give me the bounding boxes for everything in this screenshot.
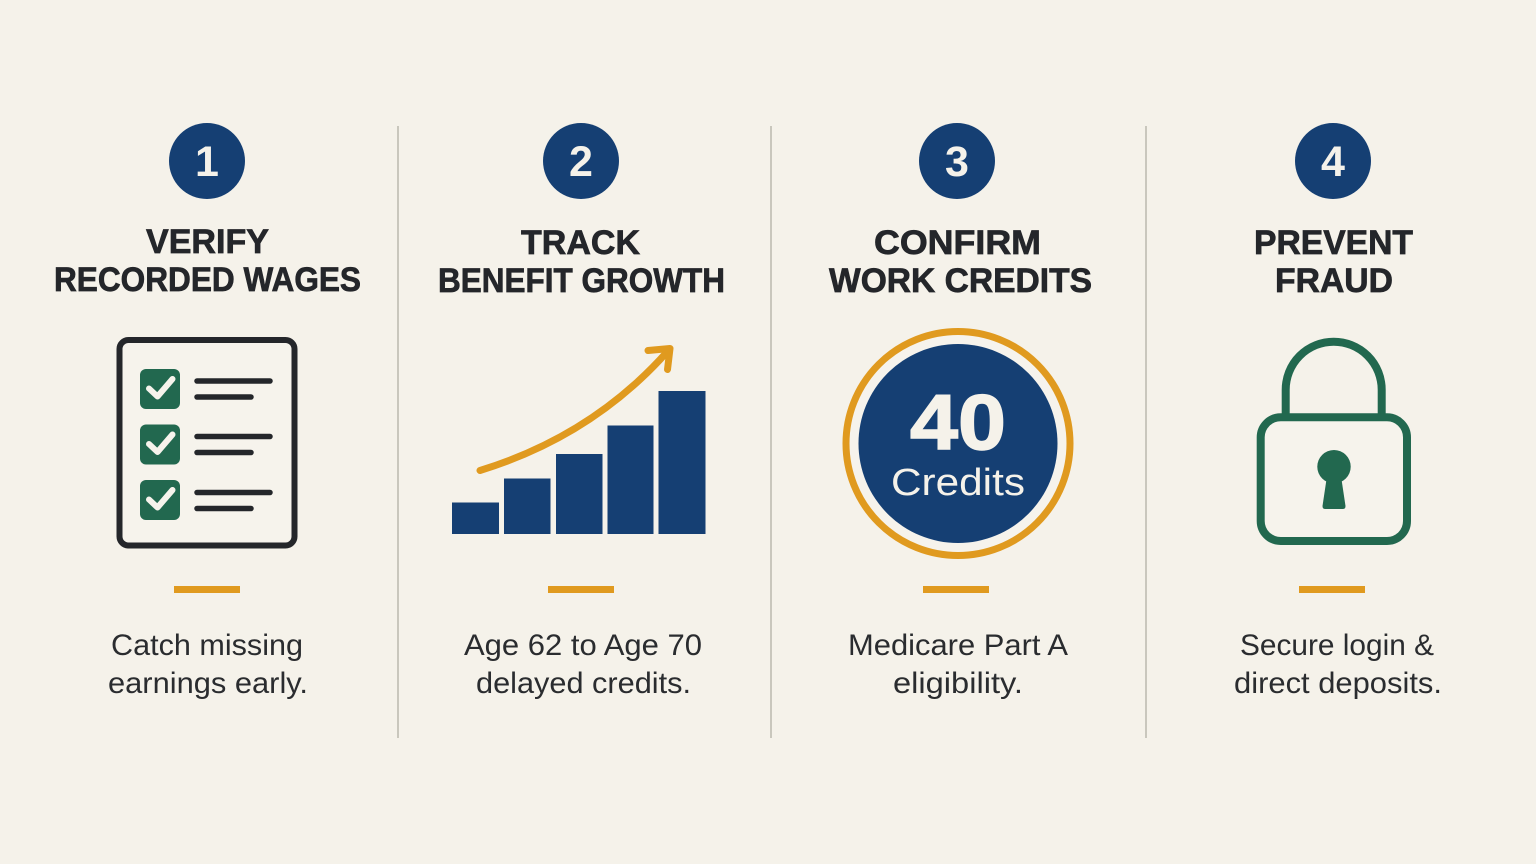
step number 3 xyxy=(919,123,995,199)
description: secure login: direct deposits. xyxy=(1234,667,1442,700)
heading: track benefit growth: BENEFIT GROWTH xyxy=(438,262,725,300)
heading: prevent fraud: PREVENT xyxy=(1254,224,1413,262)
panel: confirm work credits xyxy=(829,123,1092,700)
description: secure login xyxy=(1234,629,1442,700)
step number 4: 4 xyxy=(1321,138,1345,186)
description: catch missing earnings xyxy=(108,629,308,700)
step number 2: 2 xyxy=(569,138,593,186)
description: age 62 to age 70 xyxy=(464,629,702,700)
icon: padlock xyxy=(1261,342,1407,541)
icon: checklist xyxy=(120,340,294,546)
heading: verify recorded wages: RECORDED WAGES xyxy=(54,261,361,299)
description: age 62 to age 70: Age 62 to Age 70 xyxy=(464,629,702,662)
description: secure login: Secure login & xyxy=(1240,629,1434,662)
heading: confirm work credits: CONFIRM xyxy=(874,224,1041,262)
panel: track benefit growth xyxy=(438,123,725,700)
step number 1: 1 xyxy=(195,138,219,186)
heading: track benefit growth xyxy=(438,224,725,300)
step number 2 xyxy=(543,123,619,199)
heading: verify recorded wages: VERIFY xyxy=(146,223,269,261)
panel: prevent fraud xyxy=(1234,123,1442,700)
step number 1 xyxy=(169,123,245,199)
description: catch missing earnings: earnings early. xyxy=(108,667,308,700)
heading: confirm work credits xyxy=(829,224,1092,300)
heading: prevent fraud: FRAUD xyxy=(1275,262,1393,300)
step number 3: 3 xyxy=(945,138,969,186)
description: medicare part a xyxy=(848,629,1068,700)
step number 4 xyxy=(1295,123,1371,199)
heading: confirm work credits: WORK CREDITS xyxy=(829,262,1092,300)
arrow: growth trend xyxy=(480,348,670,470)
heading: verify recorded wages xyxy=(54,223,361,299)
description: catch missing earnings: Catch missing xyxy=(111,629,303,662)
description: age 62 to age 70: delayed credits. xyxy=(476,667,691,700)
badge: 40 credits xyxy=(846,332,1070,556)
badge: 40 credits: Credits xyxy=(891,462,1025,504)
description: medicare part a: eligibility. xyxy=(893,667,1023,700)
badge: 40 credits: 40 xyxy=(910,378,1006,466)
description: medicare part a: Medicare Part A xyxy=(848,629,1068,662)
heading: track benefit growth: TRACK xyxy=(521,224,640,262)
bar chart: rising benefit xyxy=(452,348,706,534)
panel: verify recorded wages xyxy=(54,123,361,700)
heading: prevent fraud xyxy=(1254,224,1413,300)
